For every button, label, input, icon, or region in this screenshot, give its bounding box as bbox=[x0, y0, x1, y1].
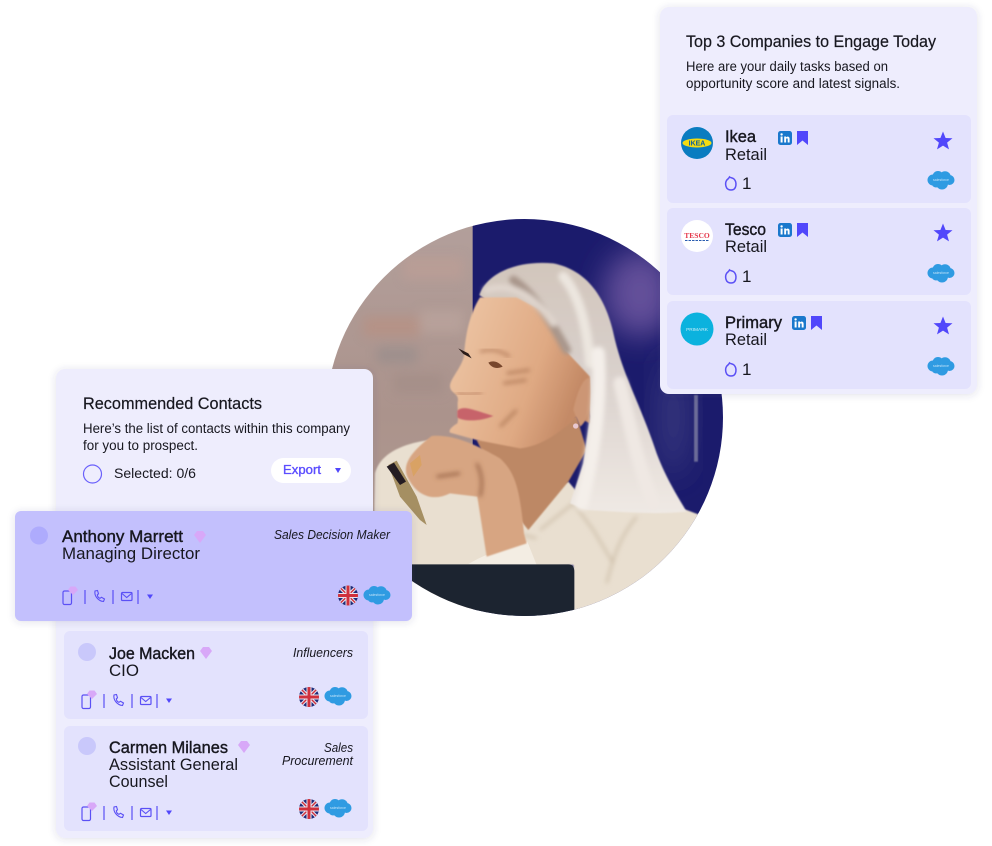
icon: gem bbox=[238, 741, 250, 753]
description text: Here are your daily tasks based on bbox=[686, 59, 888, 74]
job title: Counsel bbox=[109, 773, 168, 791]
signal count bbox=[726, 360, 751, 379]
description text: Here’s the list of contacts within this company bbox=[83, 421, 350, 436]
contact action icons bbox=[82, 690, 172, 708]
contact card: Carmen Milanes bbox=[64, 726, 368, 831]
company card: Tesco bbox=[667, 208, 971, 295]
icon: salesforce cloud: salesforce bbox=[369, 593, 385, 597]
description text: for you to prospect. bbox=[83, 438, 198, 453]
logo: Primark: PRIMARK bbox=[686, 327, 709, 333]
neck bbox=[477, 417, 587, 530]
contact name: Joe Macken bbox=[109, 645, 195, 663]
selection dot bbox=[30, 526, 48, 544]
icon: salesforce cloud bbox=[928, 357, 954, 376]
heading: top 3 companies: Top 3 Companies to Engage Today bbox=[686, 33, 937, 51]
heading: recommended contacts: Recommended Contacts bbox=[83, 395, 262, 413]
description text: opportunity score and latest signals. bbox=[686, 76, 900, 91]
signal count bbox=[726, 174, 751, 193]
icon: UK flag bbox=[299, 687, 319, 707]
persona label bbox=[282, 741, 354, 768]
icon: salesforce cloud bbox=[928, 171, 954, 190]
sector: Retail bbox=[725, 238, 767, 256]
logo: Primark bbox=[680, 312, 714, 346]
selection dot bbox=[78, 643, 96, 661]
job title: Managing Director bbox=[62, 545, 201, 563]
icon: salesforce cloud: salesforce bbox=[933, 178, 949, 182]
icon: salesforce cloud: salesforce bbox=[933, 271, 949, 275]
pen and rings bbox=[387, 455, 427, 525]
persona label: Influencers bbox=[293, 646, 353, 660]
icon: star bbox=[934, 132, 952, 149]
job title bbox=[109, 756, 238, 791]
export button bbox=[271, 458, 351, 483]
logo: Tesco bbox=[681, 220, 713, 252]
icon: salesforce cloud bbox=[324, 799, 352, 818]
icon: gem bbox=[194, 531, 206, 543]
icon: bookmark bbox=[797, 131, 808, 145]
contact action icons bbox=[63, 586, 153, 604]
icon: LinkedIn bbox=[792, 316, 806, 330]
hair back bbox=[479, 263, 687, 513]
icon: bookmark bbox=[811, 316, 822, 330]
persona label: Procurement bbox=[282, 754, 354, 768]
panel: recommended contacts bbox=[56, 369, 373, 838]
dark navy window background bbox=[473, 210, 739, 620]
persona label: Sales bbox=[324, 741, 353, 755]
icon: LinkedIn bbox=[778, 223, 792, 237]
persona label: Sales Decision Maker bbox=[274, 528, 391, 542]
icon: bookmark bbox=[797, 223, 808, 237]
blouse folds bbox=[523, 503, 637, 583]
company card: Ikea bbox=[667, 115, 971, 203]
company card: Primark bbox=[667, 301, 971, 389]
job title: CIO bbox=[109, 662, 139, 680]
sector: Retail bbox=[725, 146, 767, 164]
description text bbox=[686, 59, 900, 91]
icon: salesforce cloud: salesforce bbox=[933, 364, 949, 368]
contact name: Carmen Milanes bbox=[109, 739, 228, 757]
selection dot bbox=[78, 737, 96, 755]
contact card: Joe Macken bbox=[64, 631, 368, 719]
description text bbox=[83, 421, 350, 453]
signal count bbox=[726, 267, 751, 286]
icon: salesforce cloud bbox=[364, 586, 390, 604]
brick wall background bbox=[332, 225, 476, 610]
icon: salesforce cloud: salesforce bbox=[330, 806, 346, 810]
blouse bbox=[373, 440, 700, 620]
selected counter: Selected: 0/6 bbox=[114, 466, 196, 481]
select all checkbox bbox=[84, 465, 102, 483]
icon: salesforce cloud bbox=[324, 687, 352, 706]
highlighted contact card: Anthony Marrett bbox=[15, 511, 412, 621]
signal count: 1 bbox=[742, 267, 751, 286]
hand under chin bbox=[406, 436, 527, 557]
company name: Tesco bbox=[725, 221, 766, 239]
logo: Ikea: IKEA bbox=[689, 140, 705, 148]
contact action icons bbox=[82, 802, 172, 820]
face bbox=[450, 297, 590, 448]
contact name: Anthony Marrett bbox=[62, 528, 183, 546]
job title: Assistant General bbox=[109, 756, 238, 774]
export button: Export bbox=[283, 463, 322, 477]
icon: star bbox=[934, 316, 952, 334]
laptop bbox=[412, 564, 574, 616]
logo: Ikea bbox=[681, 127, 713, 159]
company name: Primary bbox=[725, 314, 783, 332]
blouse sleeve bbox=[468, 542, 537, 565]
logo: Tesco: TESCO bbox=[684, 231, 710, 240]
icon: UK flag bbox=[338, 586, 358, 606]
icon: LinkedIn bbox=[778, 131, 792, 145]
icon: salesforce cloud bbox=[928, 264, 954, 282]
signal count: 1 bbox=[742, 360, 751, 379]
icon: star bbox=[934, 224, 952, 241]
icon: salesforce cloud: salesforce bbox=[330, 694, 346, 698]
facial details bbox=[457, 348, 590, 429]
signal count: 1 bbox=[742, 174, 751, 193]
panel: top 3 companies bbox=[660, 7, 977, 394]
company name: Ikea bbox=[725, 128, 757, 146]
sector: Retail bbox=[725, 331, 767, 349]
hair strands bbox=[487, 277, 653, 503]
photo: smiling woman in circle bbox=[332, 219, 723, 616]
icon: gem bbox=[200, 647, 212, 659]
icon: UK flag bbox=[299, 799, 319, 819]
